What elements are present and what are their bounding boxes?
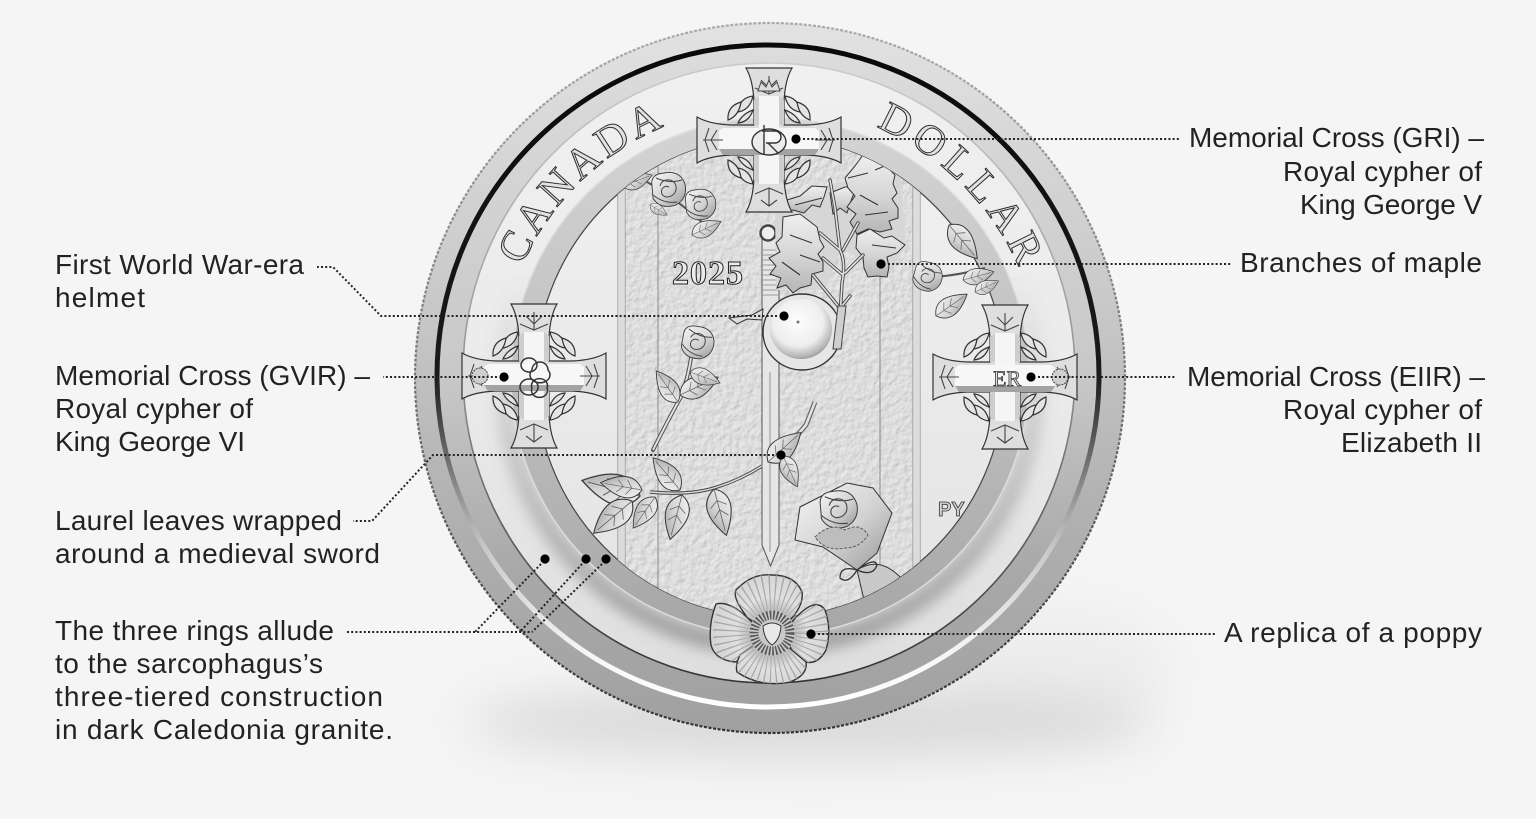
callout: laurel leaves: Laurel leaves wrapped (55, 505, 342, 536)
icon: year 2025: 2025 (672, 255, 744, 292)
coin field (463, 63, 1075, 683)
icon: helmet (729, 294, 846, 370)
icon: mint mark PY: PY (938, 499, 965, 521)
maple stems (811, 178, 865, 308)
coin (414, 22, 1126, 734)
maple leaf: left (769, 214, 824, 293)
callout: Memorial Cross EIIR (1026, 361, 1485, 458)
icon: Memorial Cross GVIR (462, 304, 606, 448)
maple trunk base over helmet (833, 306, 846, 349)
callout: Branches of maple (876, 247, 1482, 278)
icon: rose bouquet (795, 483, 902, 604)
maple leaf: lower right (856, 229, 905, 277)
callout: Memorial Cross EIIR: Memorial Cross (EIIR) – (1187, 361, 1485, 392)
callout: Memorial Cross EIIR: Royal cypher of (1283, 394, 1482, 425)
textured granite panel (625, 130, 913, 620)
poppy petals (710, 575, 829, 684)
callout: Branches of maple: Branches of maple (1240, 247, 1482, 278)
callout: Memorial Cross GVIR: Royal cypher of (55, 393, 253, 424)
cypher GVIR with rosette (472, 358, 550, 397)
dark groove and outer band (437, 45, 1099, 707)
callout: three rings (55, 554, 611, 745)
maple leaf: centre (830, 187, 857, 214)
icon: Memorial Cross EIIR (933, 305, 1077, 449)
callout: Memorial Cross GRI (791, 122, 1484, 220)
callout: laurel leaves: around a medieval sword (55, 538, 380, 569)
callout: laurel leaves (55, 450, 786, 569)
cypher GRI with crown (752, 80, 786, 155)
cypher EIIR with rosette (993, 366, 1068, 391)
callout: helmet: helmet (55, 282, 145, 313)
callout: Memorial Cross GRI: King George V (1300, 189, 1482, 220)
icon: Memorial Cross GRI (697, 68, 841, 212)
lettering: DOLLAR: DOLLAR (876, 101, 1040, 268)
maple leaf: upper right (845, 155, 898, 234)
maple foliage backing (775, 165, 906, 290)
callout: Memorial Cross GRI: Memorial Cross (GRI) – (1189, 122, 1484, 153)
poppy pleats (732, 593, 812, 673)
callout: Memorial Cross GVIR (55, 360, 509, 457)
callout: three rings: The three rings allude (55, 615, 334, 646)
callout: Memorial Cross GVIR: King George VI (55, 426, 245, 457)
icon: sword (760, 226, 779, 566)
icon: top roses (625, 172, 722, 238)
coin ground shadow (465, 610, 1170, 758)
icon: right rose (909, 218, 1001, 324)
icon: poppy (710, 575, 829, 684)
callout: three rings: in dark Caledonia granite. (55, 714, 393, 745)
callout: Memorial Cross GRI: Royal cypher of (1283, 156, 1482, 187)
icon: laurel branch (578, 451, 762, 543)
icon: laurel leaf on sword (761, 402, 815, 490)
maple leaf: upper left (784, 186, 827, 213)
cypher EIIR with rosette: ER (993, 366, 1021, 391)
inner field (535, 137, 1005, 617)
central panel (578, 130, 920, 620)
icon: maple branches (768, 156, 906, 308)
callout: Memorial Cross EIIR: Elizabeth II (1341, 427, 1482, 458)
callout: helmet: First World War-era (55, 249, 304, 280)
coin rim (415, 23, 1125, 733)
callout: poppy: A replica of a poppy (1224, 617, 1482, 648)
icon: rose stem (648, 323, 723, 450)
callout: helmet (55, 249, 789, 321)
callout: three rings: to the sarcophagus’s (55, 648, 323, 679)
callout: Memorial Cross GVIR: Memorial Cross (GVIR) – (55, 360, 370, 391)
callout: three rings: three-tiered construction (55, 681, 383, 712)
poppy stamens (749, 610, 795, 656)
ring shading (504, 114, 1036, 646)
inner ring band (511, 118, 1029, 636)
callout: poppy (806, 617, 1482, 648)
lettering: CANADA: CANADA (500, 106, 664, 260)
